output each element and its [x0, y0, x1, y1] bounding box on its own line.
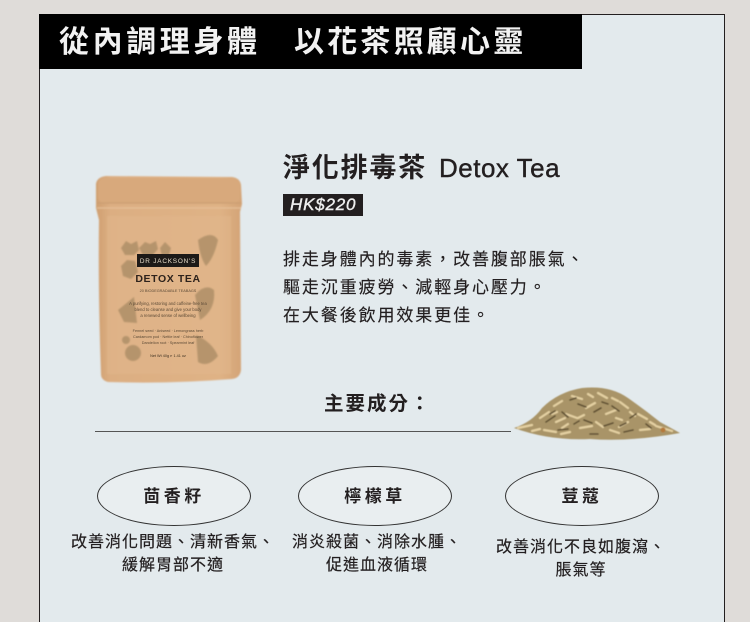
pouch label: Dandelion root · Spearmint leaf: [142, 341, 195, 345]
caption: [496, 538, 666, 579]
caption: [71, 533, 275, 574]
pouch label: a renewed sense of wellbeing: [140, 313, 196, 318]
product description: 在大餐後飲用效果更佳。: [283, 306, 491, 325]
product description: 排走身體內的毒素，改善腹部脹氣、: [283, 250, 585, 269]
caption: 消炎殺菌、消除水腫、: [292, 534, 462, 551]
pouch label: 20 BIODEGRADABLE TEABAGS: [140, 289, 197, 293]
ingredient 2: [292, 466, 462, 574]
ingredient 3: [496, 466, 666, 579]
title text: 從內調理身體: [59, 26, 261, 59]
caption: [292, 533, 462, 574]
caption: 促進血液循環: [326, 557, 428, 574]
pouch label: DETOX TEA: [135, 273, 201, 285]
pouch label: Cardamom pod · Nettle leaf · Chinoflower: [133, 335, 204, 339]
title banner: [39, 14, 582, 69]
pouch label: blend to cleanse and give your body: [134, 307, 202, 312]
title text second part: 以花茶照顧心靈: [294, 26, 526, 59]
pouch label: DR JACKSON'S: [140, 258, 196, 265]
ellipse label: cardamom: 荳蔻: [562, 487, 602, 506]
ellipse label: fennel: [97, 466, 251, 526]
pouch label: Fennel seed · Aniseed · Lemongrass herb: [133, 329, 203, 333]
price tag: HK$220: [290, 195, 356, 214]
product description: [283, 250, 585, 325]
product description: 驅走沉重疲勞、減輕身心壓力。: [283, 278, 548, 297]
product name: 淨化排毒茶 Detox Tea: [283, 153, 560, 183]
divider line: [95, 431, 511, 432]
caption: 脹氣等: [555, 562, 607, 579]
pouch label: [129, 258, 208, 358]
ingredients heading: 主要成分：: [324, 393, 432, 415]
caption: 改善消化問題、清新香氣、: [71, 534, 275, 551]
ellipse label: cardamom: [505, 466, 659, 526]
ellipse label: lemongrass: [298, 466, 452, 526]
product image: tea pouch: [95, 175, 243, 384]
caption: 緩解胃部不適: [122, 557, 224, 574]
ellipse label: lemongrass: 檸檬草: [344, 487, 406, 506]
ellipse label: fennel: 茴香籽: [143, 487, 205, 506]
pouch label: Net Wt 40g ℮ 1.41 oz: [150, 354, 186, 358]
caption: 改善消化不良如腹瀉、: [496, 539, 666, 556]
image: herb pile: [514, 386, 680, 440]
pouch label: A purifying, restoring and caffeine-free tea: [129, 301, 208, 306]
ingredient 1: [71, 466, 275, 574]
